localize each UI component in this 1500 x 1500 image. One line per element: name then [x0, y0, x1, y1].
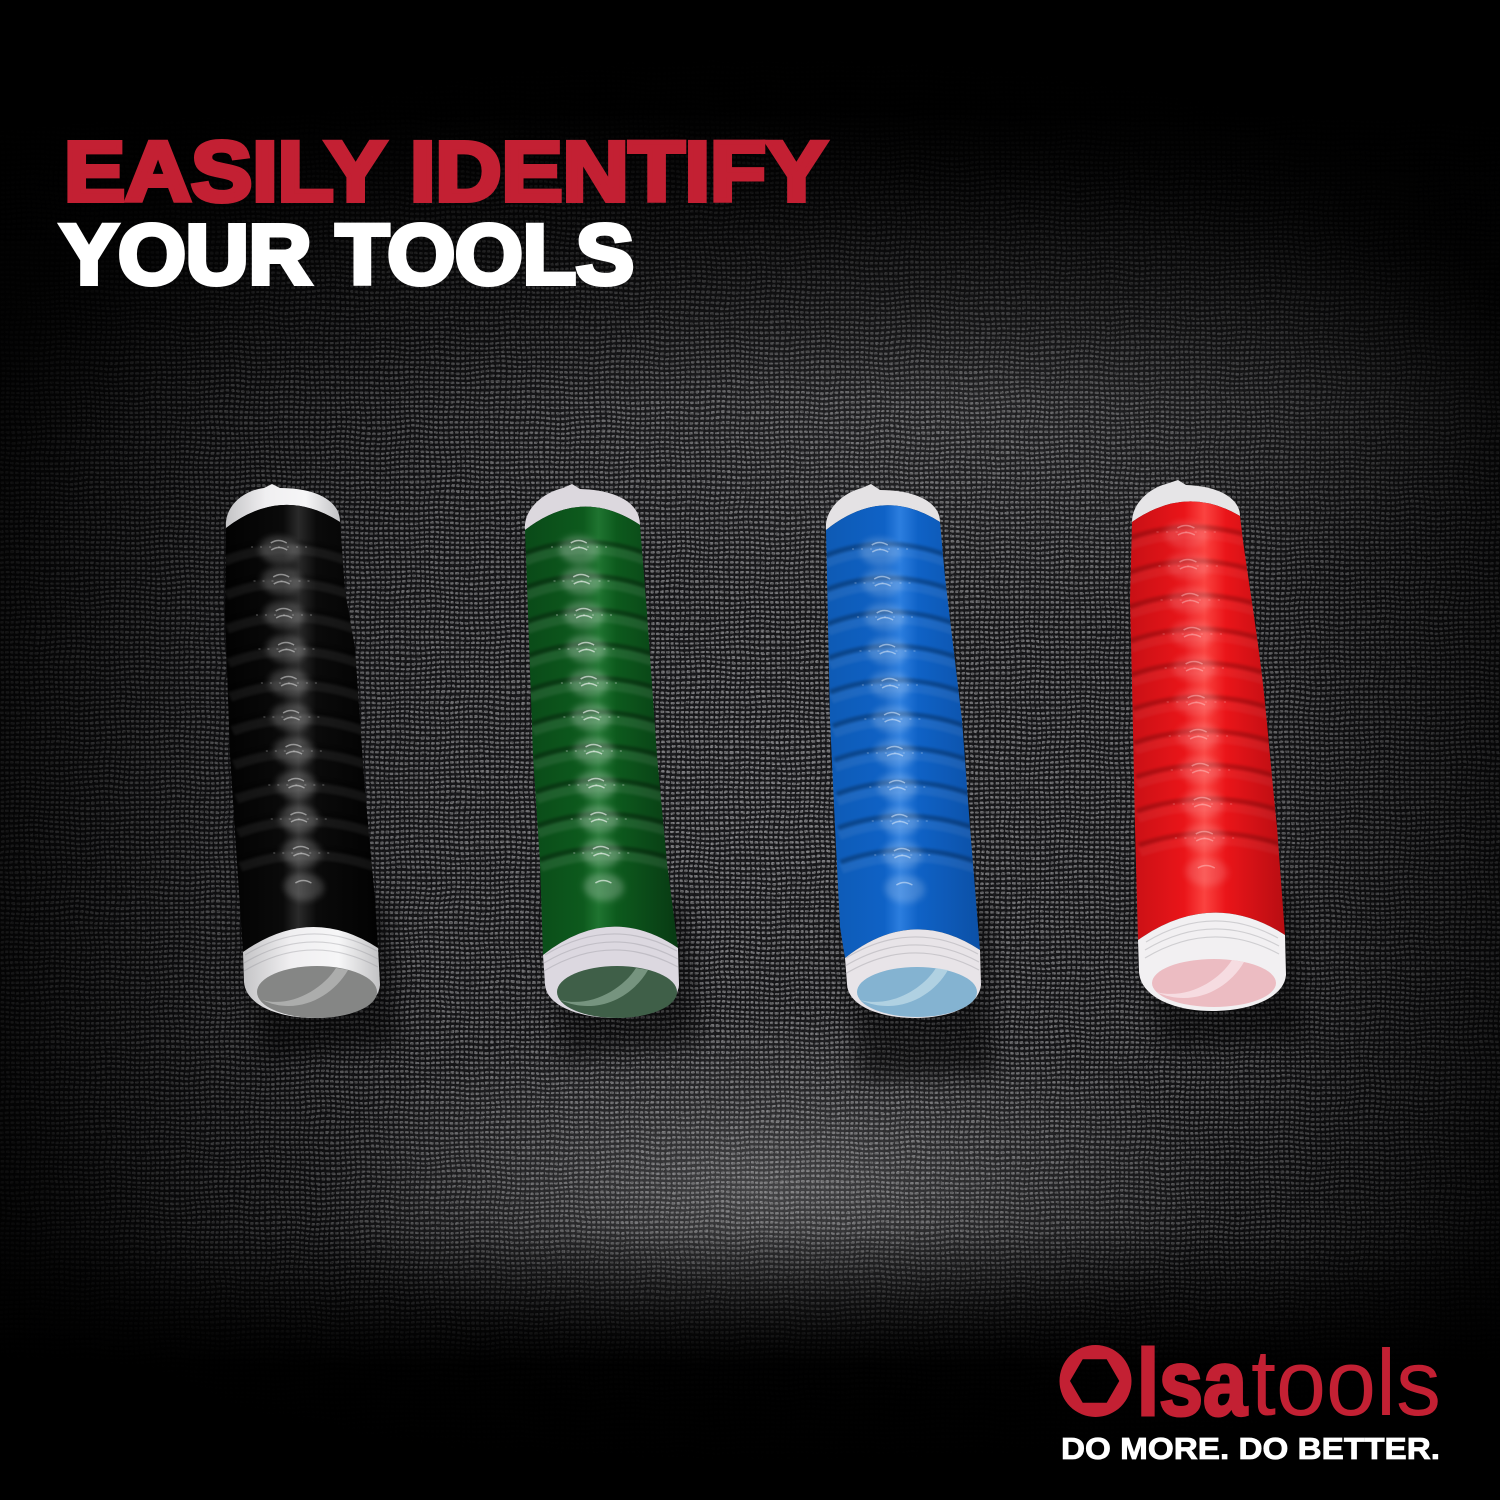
logo: Olsatools: [1060, 1330, 1441, 1466]
tube: blue: [817, 484, 995, 1080]
logo: Olsatools: tools: [1251, 1330, 1441, 1435]
wordmark: lsa: [1137, 1330, 1248, 1435]
title line: easily identify: EASILY IDENTIFY: [64, 124, 827, 218]
title: [60, 124, 827, 302]
tube: red: [1120, 480, 1305, 1050]
tagline: DO MORE. DO BETTER.: [1061, 1431, 1440, 1466]
icon: hex socket O: [1060, 1345, 1132, 1417]
tube: black: [216, 484, 400, 1060]
title line: your tools: YOUR TOOLS: [60, 208, 634, 302]
tube: green: [516, 484, 700, 1060]
